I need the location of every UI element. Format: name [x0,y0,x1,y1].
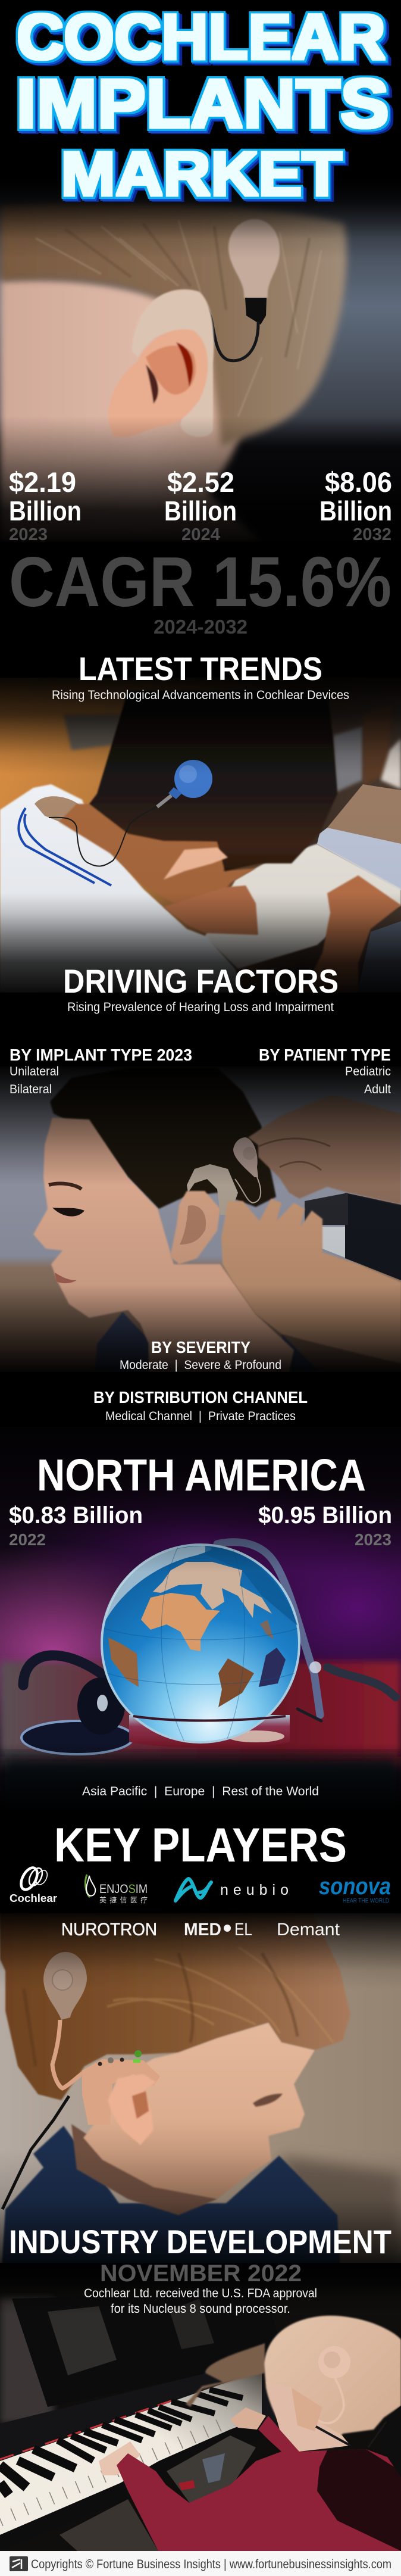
stat: north america 2022: 2022 [9,1530,46,1549]
icon: ear [109,329,208,437]
photo: woman being fitted with implant [0,1066,401,1372]
neck and face [59,804,256,903]
sweater [117,2416,401,2551]
text: latest trend description: Rising Technological Advancements in Cochlear Devices [52,688,349,702]
CAGR period: 2024-2032 [153,616,248,638]
title: IMPLANTS [16,65,389,142]
chest piece [21,1661,321,1754]
logo: MED-EL: EL [234,1920,252,1939]
stat: 2023 market size: 2023 [9,525,48,544]
logo: EnjoSim: ENJOSIM [99,1882,148,1896]
icon: ear processor [82,2050,160,2145]
logo: EnjoSim: 英捷信医疗 [99,1896,148,1904]
photo: boy with blue implant studying [0,678,401,994]
band behind logos [0,1810,401,1913]
heading: latest trends: LATEST TRENDS [79,650,322,687]
text: distribution channel list: Medical Channel | Private Practices [105,1409,296,1423]
white keys [0,2370,262,2535]
stat: 2023 market size: $2.19 [9,466,76,498]
text: development description [84,2287,317,2316]
logo: Sonova: HEAR THE WORLD [343,1898,389,1904]
stat: 2032 market size [319,466,392,544]
title: MARKET [61,139,342,209]
Africa [141,1593,220,1651]
stat: north america 2023: $0.95 Billion [258,1502,392,1529]
text: development description: for its Nucleus 8 sound processor. [111,2302,290,2316]
text: implant type list: Bilateral [10,1083,52,1096]
logo: MED-EL: MED [184,1920,221,1939]
icon: blue implant coil [157,760,212,807]
heading: by implant type: BY IMPLANT TYPE 2023 [10,1046,192,1064]
icon: processor on ear [187,1137,261,1215]
cable [2,2096,69,2209]
stat: 2024 market size [164,466,237,544]
base [129,1715,290,1748]
photo: child with cochlear implant behind the ear [0,195,401,539]
logo: neubio [176,1879,289,1901]
front rail [0,2418,268,2551]
photo: glass globe with stethoscope [0,1427,401,1832]
logo: Cochlear [10,1865,57,1904]
heading: by distribution channel: BY DISTRIBUTION CHANNEL [93,1388,308,1406]
hands [164,885,258,935]
hands [186,2343,265,2407]
text: patient type list: Pediatric [345,1065,391,1078]
icon: Fortune Business Insights mark [10,2556,28,2571]
hoodie [0,2126,342,2294]
icon: coil [43,1952,89,2088]
text: development date: NOVEMBER 2022 [100,2260,302,2287]
cable [49,807,157,866]
stat: 2023 market size: Billion [9,495,82,526]
title: COCHLEAR [17,1,386,73]
stat: 2032 market size: Billion [319,495,392,526]
icon: behind-the-ear processor [132,289,214,437]
music stand [12,2293,286,2407]
stat: 2032 market size: $8.06 [325,466,392,498]
face [33,1118,294,1372]
globe [102,1545,299,1742]
logo: Sonova: sonova [319,1873,391,1900]
stat: 2032 market size: 2032 [353,525,391,544]
photo: toddler with implant processor [0,1906,401,2294]
footer [0,2551,401,2576]
neck [71,2124,217,2215]
stat: 2024 market size: 2024 [181,525,220,544]
text: implant type list [10,1065,59,1096]
heading: key players: KEY PLAYERS [54,1819,347,1872]
heading: by severity: BY SEVERITY [151,1338,250,1356]
text: patient type list [345,1065,391,1096]
text: development description: Cochlear Ltd. received the U.S. FDA approval [84,2287,317,2300]
logo: MED-EL [184,1920,252,1939]
text: severity list: Moderate | Severe & Profound [120,1358,281,1372]
ear [170,1191,220,1264]
icon: implant coil on head [199,219,280,361]
notebook [205,844,401,969]
photo: child playing piano [0,2263,401,2551]
hands [248,1094,401,1205]
logo: Demant: Demant [277,1920,340,1939]
red felt [0,2400,173,2459]
stat: north america 2022 [9,1502,143,1549]
piano body [0,2358,280,2495]
hair [50,1068,276,1209]
text: patient type list: Adult [364,1083,391,1096]
shirt [0,784,244,993]
stethoscope tubes [23,1542,396,1721]
stat: north america 2023: 2023 [355,1530,391,1549]
stat: north america 2022: $0.83 Billion [9,1502,143,1529]
stat: north america 2023 [258,1502,392,1549]
hair [0,1906,350,2100]
logo: neubio: neubio [220,1882,289,1898]
logo: Cochlear: Cochlear [10,1892,57,1904]
head [89,691,337,871]
floor under piano [59,2499,158,2551]
stat: 2024 market size: Billion [164,495,237,526]
text: driving factor description: Rising Prevalence of Hearing Loss and Impairment [67,1000,334,1014]
shirt collar [95,1312,319,1372]
logo: Nurotron: NUROTRON [61,1920,157,1939]
heading: driving factors: DRIVING FACTORS [63,962,339,1000]
stat: 2024 market size: $2.52 [167,466,234,498]
logo: EnjoSim [85,1875,148,1904]
title [16,1,389,209]
head [264,2316,401,2450]
face [83,2023,315,2199]
ear [164,847,228,880]
ear shape [108,2074,156,2145]
black keys [0,2390,243,2495]
stat: 2023 market size [9,466,82,544]
heading: by patient type: BY PATIENT TYPE [259,1046,391,1064]
text: implant type list: Unilateral [10,1065,59,1078]
Europe and Asia [153,1562,272,1618]
text: other regions: Asia Pacific | Europe | Rest of the World [82,1785,319,1798]
icon: coil and processor [292,2346,386,2447]
